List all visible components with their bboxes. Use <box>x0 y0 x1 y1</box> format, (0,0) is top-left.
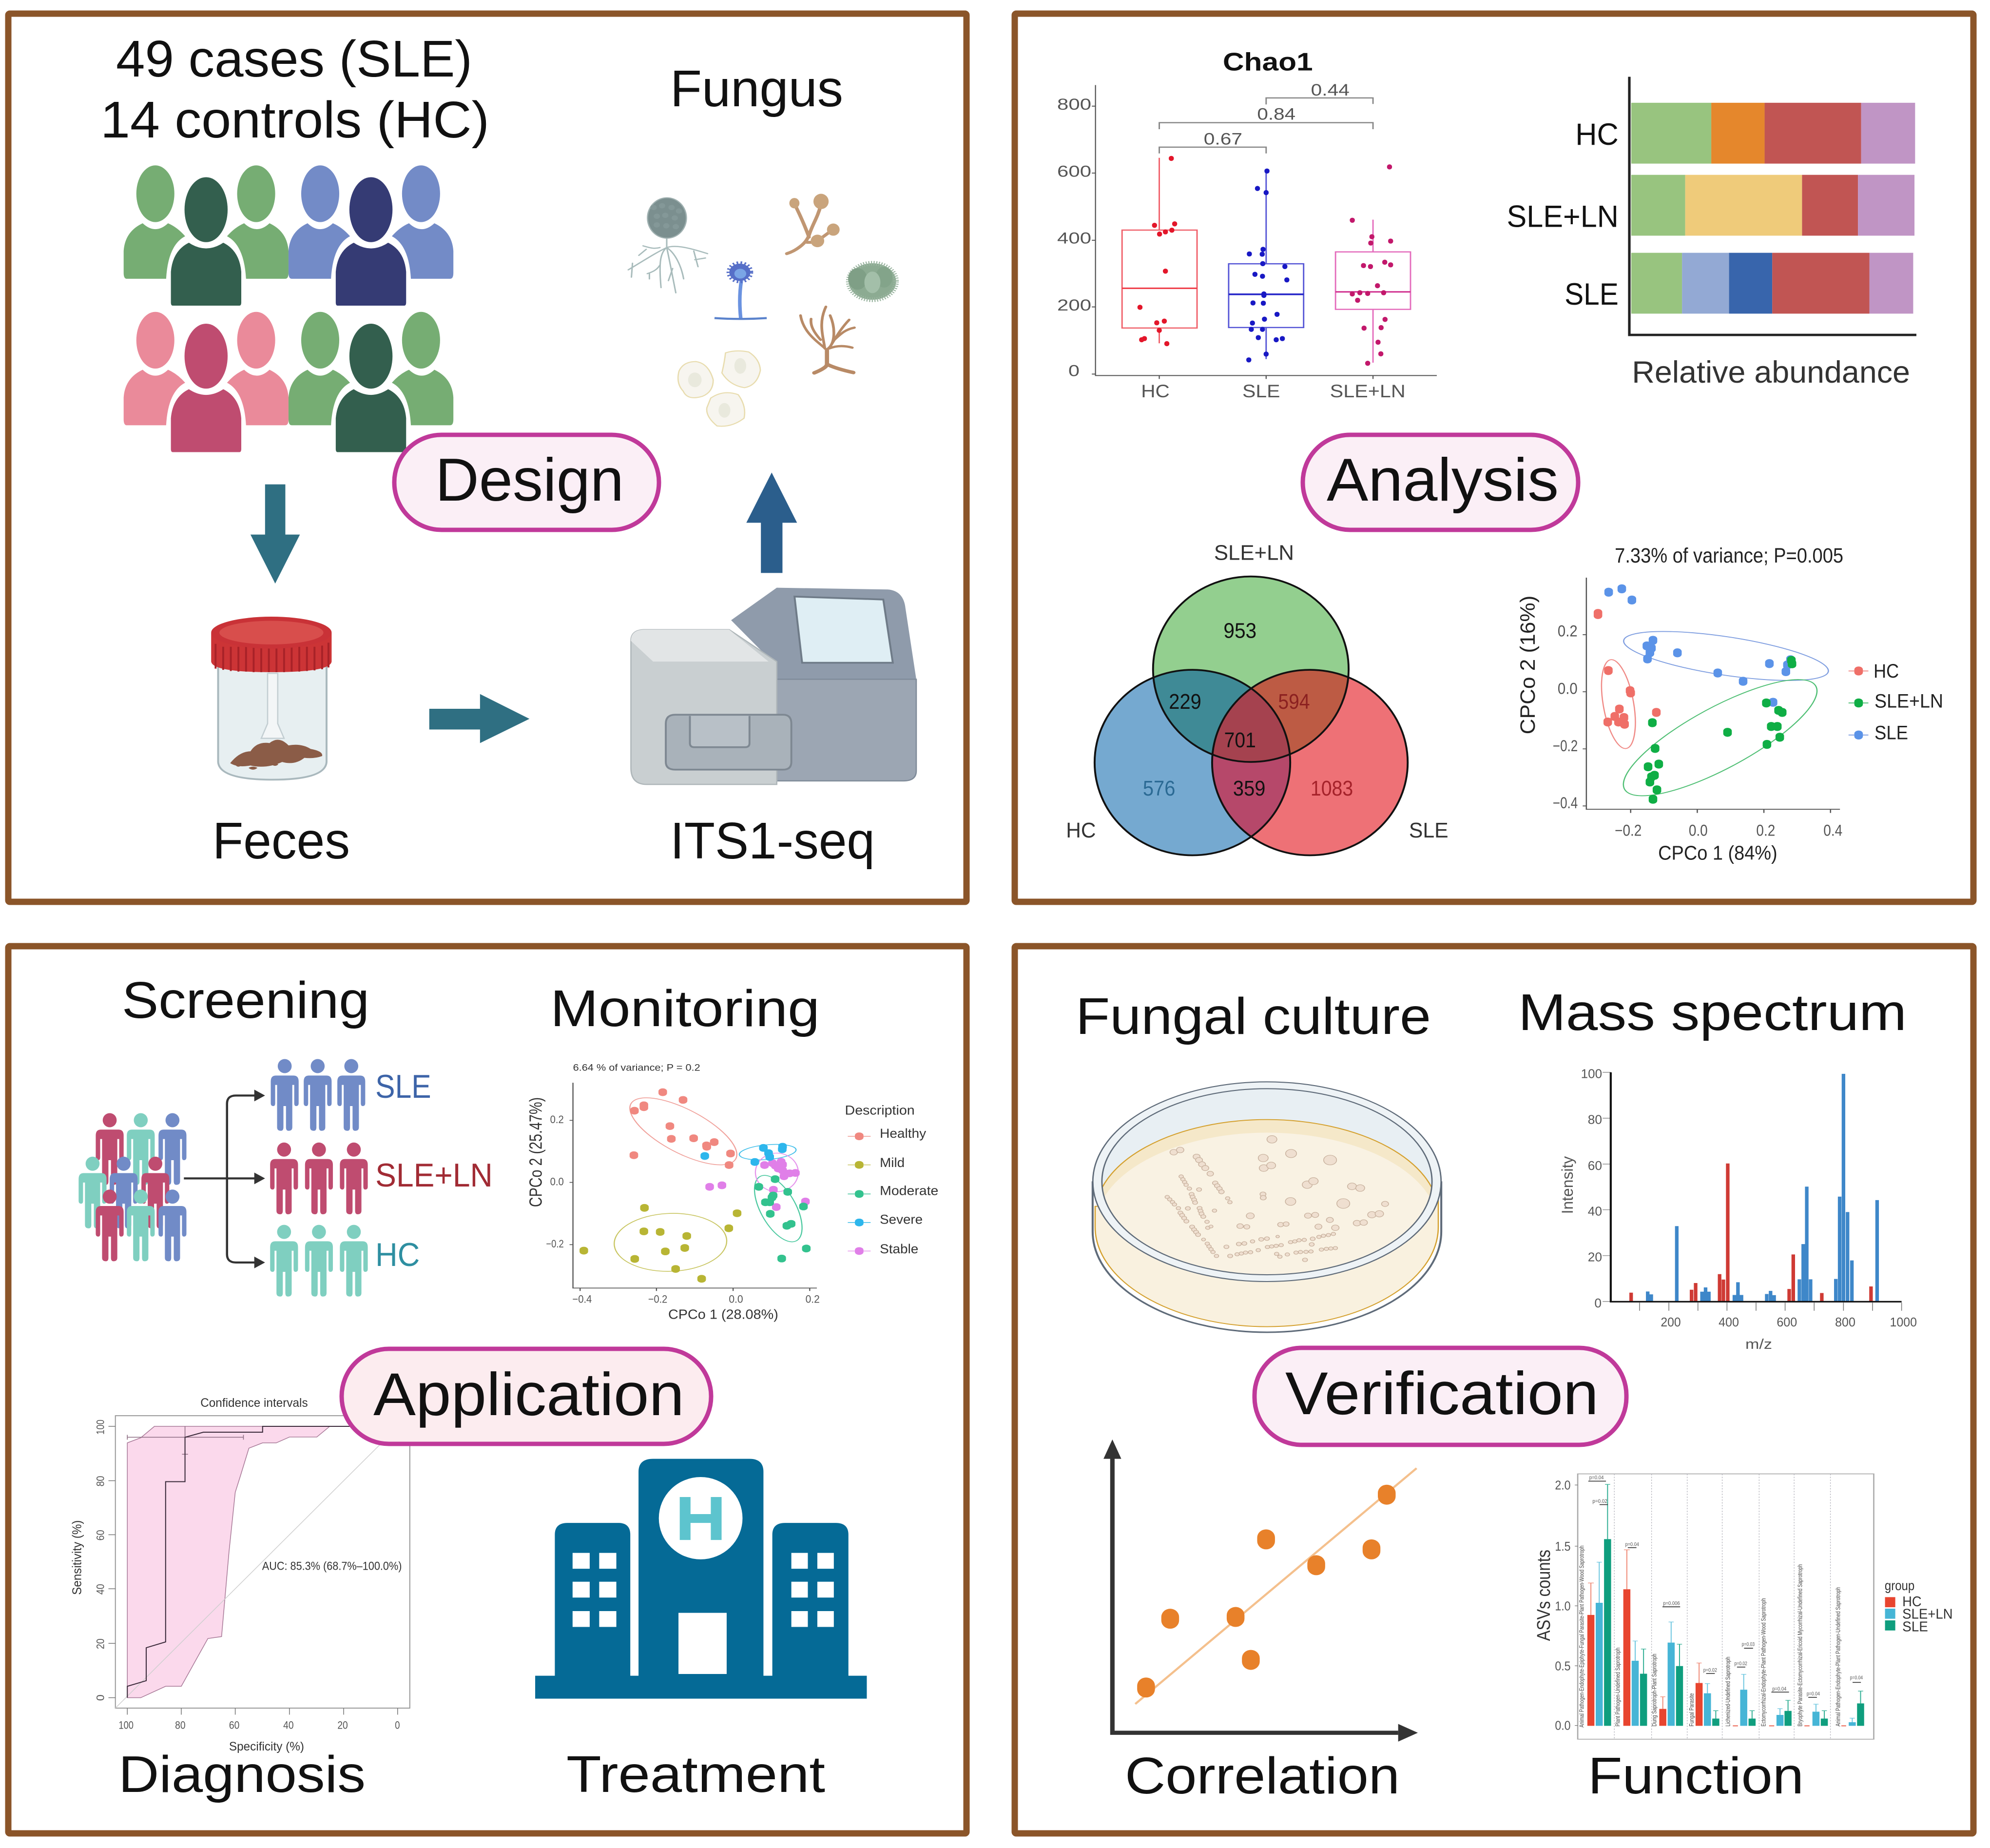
chart: function guild bars: p=0.04 <box>1589 1475 1604 1481</box>
chart: function guild bars: Ectomycorrhizal-Endophyte-Plant Pathogen-Wood Saprotroph <box>1761 1598 1767 1727</box>
diagram: screening people <box>78 1059 493 1297</box>
panel: application <box>8 946 966 1833</box>
chart: ROC curve: Sensitivity (%) <box>70 1520 84 1595</box>
diagram: screening people: SLE+LN <box>375 1157 493 1194</box>
chart: PCoA by severity: CPCo 1 (28.08%) <box>668 1307 778 1322</box>
heading: correlation: Correlation <box>1125 1747 1400 1805</box>
chart: ROC curve: 80 <box>175 1719 186 1731</box>
icon: sequencing machine <box>631 588 916 784</box>
chart: PCoA by severity: 0.2 <box>550 1113 564 1126</box>
chart: function guild bars: Fungal Parasite <box>1689 1693 1696 1727</box>
heading: fungus: Fungus <box>670 60 843 117</box>
chart: ROC curve <box>70 1397 410 1753</box>
fungus: blue conidiophore <box>715 264 767 319</box>
panel: analysis <box>1015 14 1973 902</box>
fungus: white colonies <box>678 351 760 426</box>
chart: ROC curve: 40 <box>283 1719 294 1731</box>
chart: relative abundance stacked bars: Relative abundance <box>1632 355 1910 389</box>
chart: PCoA by severity: 0.2 <box>806 1293 820 1305</box>
chart: PCoA by group: 0.2 <box>1558 622 1578 640</box>
chart: function guild bars: p=0.04 <box>1807 1691 1820 1697</box>
chart: mass spectrum: 400 <box>1719 1315 1739 1329</box>
chart: Chao1 box plot: 200 <box>1057 296 1091 314</box>
icon: fungi illustrations <box>628 194 896 426</box>
chart: PCoA by severity: Mild <box>880 1155 905 1170</box>
chart: Venn diagram <box>1066 541 1449 856</box>
chart: Venn diagram: 701 <box>1224 728 1256 752</box>
fungus: brown plant <box>800 307 854 373</box>
badge: application <box>342 1349 711 1444</box>
badge: application: Application <box>373 1361 684 1428</box>
heading: controls: 14 controls (HC) <box>100 91 489 149</box>
chart: mass spectrum: 800 <box>1835 1315 1855 1329</box>
panel: verification <box>1015 946 1973 1833</box>
badge: design <box>394 435 659 530</box>
chart: PCoA by group: SLE+LN <box>1874 690 1943 712</box>
chart: PCoA by severity: 0.0 <box>729 1293 743 1305</box>
chart: Chao1 box plot: 0.84 <box>1257 105 1295 123</box>
chart: PCoA by severity: Stable <box>880 1242 918 1256</box>
chart: ROC curve: Specificity (%) <box>229 1740 304 1753</box>
chart: mass spectrum: 200 <box>1661 1315 1681 1329</box>
chart: function guild bars: Dung Saprotroph-Plant Saprotroph <box>1652 1653 1658 1727</box>
chart: relative abundance stacked bars: HC <box>1575 117 1619 151</box>
chart: Venn diagram: HC <box>1066 818 1096 842</box>
chart: function guild bars: Bryophyte Parasite-Ectomycorrhizal-Ericoid Mycorrhizal-Undefined Saprotroph <box>1797 1564 1804 1727</box>
chart: function guild bars: 0.5 <box>1555 1659 1571 1673</box>
chart: function guild bars: p=0.02 <box>1592 1498 1607 1504</box>
badge: analysis <box>1303 435 1578 530</box>
arrow: sequencer to fungus <box>746 472 797 573</box>
chart: function guild bars: p=0.04 <box>1772 1686 1786 1692</box>
chart: ROC curve: 20 <box>94 1638 106 1649</box>
panel: design <box>8 14 966 902</box>
chart: function guild bars: HC <box>1902 1594 1922 1610</box>
chart: relative abundance stacked bars: SLE <box>1565 277 1619 311</box>
chart: mass spectrum: 1000 <box>1890 1315 1917 1329</box>
chart: ROC curve: 60 <box>94 1530 106 1540</box>
chart: function guild bars: p=0.04 <box>1850 1675 1863 1681</box>
chart: PCoA by group: CPCo 2 (16%) <box>1516 596 1539 734</box>
chart: ROC curve: 80 <box>94 1476 106 1486</box>
icon: specimen jar <box>211 617 331 779</box>
chart: PCoA by severity: −0.2 <box>546 1238 564 1250</box>
chart: PCoA by severity: Description <box>845 1103 915 1118</box>
chart: function guild bars: SLE+LN <box>1902 1606 1953 1622</box>
text: feces: Feces <box>213 812 350 870</box>
chart: function guild bars: p=0.02 <box>1703 1667 1717 1673</box>
chart: PCoA by severity: −0.2 <box>648 1293 667 1305</box>
chart: function guild bars: Animal Pathogen-Endophyte-Plant Pathogen-Undefined Saprotroph <box>1835 1587 1842 1727</box>
chart: function guild bars: Plant Pathogen-Undefined Saprotroph <box>1615 1648 1622 1727</box>
chart: ROC curve: Confidence intervals <box>200 1397 308 1410</box>
chart: mass spectrum: Intensity <box>1559 1156 1577 1214</box>
chart: Venn diagram: 953 <box>1223 619 1256 642</box>
chart: PCoA by group: −0.2 <box>1615 822 1642 839</box>
chart: function guild bars: 1.5 <box>1555 1539 1571 1554</box>
chart: PCoA by severity: Severe <box>880 1212 923 1227</box>
chart: mass spectrum: 0 <box>1594 1296 1602 1310</box>
heading: function: Function <box>1588 1747 1804 1805</box>
chart: ROC curve: 100 <box>118 1719 134 1731</box>
chart: function guild bars: p=0.04 <box>1625 1541 1639 1548</box>
chart: PCoA by group: 0.2 <box>1756 822 1775 839</box>
chart: function guild bars: 2.0 <box>1555 1478 1571 1492</box>
text: ITS1-seq: ITS1-seq <box>670 812 875 870</box>
badge: analysis: Analysis <box>1327 447 1559 514</box>
chart: PCoA by severity: 0.0 <box>550 1176 564 1187</box>
chart: Venn diagram: 1083 <box>1311 777 1353 800</box>
chart: ROC curve: 40 <box>94 1584 106 1595</box>
chart: function guild bars: p=0.03 <box>1742 1642 1755 1648</box>
chart: PCoA by group: 0.0 <box>1558 680 1578 698</box>
chart: Chao1 box plot <box>1057 47 1437 401</box>
chart: mass spectrum <box>1559 1067 1917 1352</box>
chart: ROC curve: 20 <box>337 1719 348 1731</box>
chart: Venn diagram: SLE <box>1409 818 1449 842</box>
icon: petri dish <box>1093 1085 1441 1332</box>
chart: correlation scatter <box>1103 1439 1418 1742</box>
chart: Chao1 box plot: 800 <box>1057 96 1091 114</box>
chart: PCoA by group: 0.4 <box>1823 822 1842 839</box>
chart: mass spectrum: 20 <box>1588 1250 1602 1264</box>
chart: Venn diagram: 594 <box>1278 690 1310 714</box>
icon: groups of people <box>124 165 453 454</box>
chart: function guild bars: 0.0 <box>1555 1719 1571 1733</box>
chart: Chao1 box plot: 600 <box>1057 162 1091 180</box>
chart: PCoA by group: −0.2 <box>1553 737 1578 755</box>
arrow: people to feces <box>251 485 300 584</box>
fungus: grey sporangium <box>628 198 708 293</box>
heading: screening: Screening <box>122 972 369 1029</box>
chart: Chao1 box plot: 0.67 <box>1204 130 1242 148</box>
chart: PCoA by group: CPCo 1 (84%) <box>1658 842 1777 864</box>
chart: Chao1 box plot: 0.44 <box>1311 80 1350 99</box>
chart: mass spectrum: 40 <box>1588 1205 1602 1219</box>
chart: function guild bars: group <box>1885 1578 1914 1593</box>
diagram: screening people: SLE <box>375 1068 431 1105</box>
fungus: green moss <box>848 263 896 300</box>
chart: ROC curve: 0 <box>94 1694 106 1701</box>
badge: design: Design <box>435 447 624 514</box>
chart: function guild bars: p=0.02 <box>1735 1661 1747 1667</box>
chart: Chao1 box plot: 0 <box>1068 362 1080 380</box>
badge: verification: Verification <box>1285 1360 1599 1427</box>
heading: mass spectrum: Mass spectrum <box>1518 984 1907 1041</box>
chart: Chao1 box plot: SLE <box>1242 382 1280 401</box>
chart: function guild bars <box>1533 1474 1953 1739</box>
chart: PCoA by severity: CPCo 2 (25.47%) <box>526 1097 546 1207</box>
chart: Chao1 box plot: HC <box>1141 382 1170 401</box>
chart: mass spectrum: 100 <box>1581 1067 1602 1081</box>
chart: PCoA by severity: 6.64 % of variance; P = 0.2 <box>573 1062 700 1073</box>
chart: PCoA by group <box>1516 544 1943 864</box>
chart: relative abundance stacked bars <box>1507 77 1916 389</box>
heading: diagnosis: Diagnosis <box>118 1746 366 1803</box>
diagram: screening people: HC <box>375 1236 420 1273</box>
chart: PCoA by group: HC <box>1874 661 1899 682</box>
heading: treatment: Treatment <box>566 1746 825 1803</box>
badge: verification <box>1255 1348 1626 1445</box>
chart: Venn diagram: SLE+LN <box>1214 541 1294 564</box>
chart: function guild bars: Animal Pathogen-Endophyte-Epiphyte-Fungal Parasite-Plant Pathogen-Wood Saprotroph <box>1579 1546 1585 1728</box>
chart: relative abundance stacked bars: SLE+LN <box>1507 199 1619 233</box>
chart: PCoA by group: 0.0 <box>1689 822 1708 839</box>
chart: function guild bars: 1.0 <box>1555 1599 1571 1613</box>
heading: cases: 49 cases (SLE) <box>116 30 472 88</box>
chart: Chao1 box plot: SLE+LN <box>1330 382 1406 401</box>
heading: monitoring: Monitoring <box>550 980 820 1037</box>
chart: PCoA by group: −0.4 <box>1553 795 1578 812</box>
chart: function guild bars: ASVs counts <box>1533 1550 1554 1641</box>
chart: mass spectrum: m/z <box>1745 1337 1772 1352</box>
chart: mass spectrum: 80 <box>1588 1113 1602 1127</box>
chart: Venn diagram: 229 <box>1169 690 1201 714</box>
chart: PCoA by group: 7.33% of variance; P=0.005 <box>1615 544 1843 567</box>
chart: PCoA by severity: −0.4 <box>572 1293 592 1305</box>
chart: PCoA by severity <box>526 1062 938 1322</box>
chart: PCoA by group: SLE <box>1874 722 1908 744</box>
chart: function guild bars: p=0.006 <box>1663 1600 1680 1607</box>
chart: Venn diagram: 359 <box>1233 777 1265 800</box>
chart: mass spectrum: 600 <box>1777 1315 1797 1329</box>
chart: ROC curve: 0 <box>395 1719 400 1731</box>
arrow: feces to sequencer <box>429 694 529 743</box>
chart: Chao1 box plot: Chao1 <box>1223 47 1313 76</box>
chart: ROC curve: 100 <box>94 1420 106 1435</box>
chart: mass spectrum: 60 <box>1588 1159 1602 1173</box>
chart: PCoA by severity: Moderate <box>880 1184 938 1198</box>
chart: PCoA by severity: Healthy <box>880 1126 926 1141</box>
chart: function guild bars: SLE <box>1902 1619 1928 1634</box>
chart: Chao1 box plot: 400 <box>1057 229 1091 247</box>
icon: hospital <box>535 1459 867 1699</box>
chart: ROC curve: 60 <box>229 1719 239 1731</box>
chart: ROC curve: AUC: 85.3% (68.7%–100.0%) <box>262 1560 402 1573</box>
chart: Venn diagram: 576 <box>1143 777 1175 800</box>
fungus: brown branch <box>787 194 840 253</box>
heading: fungal culture: Fungal culture <box>1076 988 1431 1045</box>
chart: function guild bars: Lichenized-Undefined Saprotroph <box>1725 1656 1732 1727</box>
